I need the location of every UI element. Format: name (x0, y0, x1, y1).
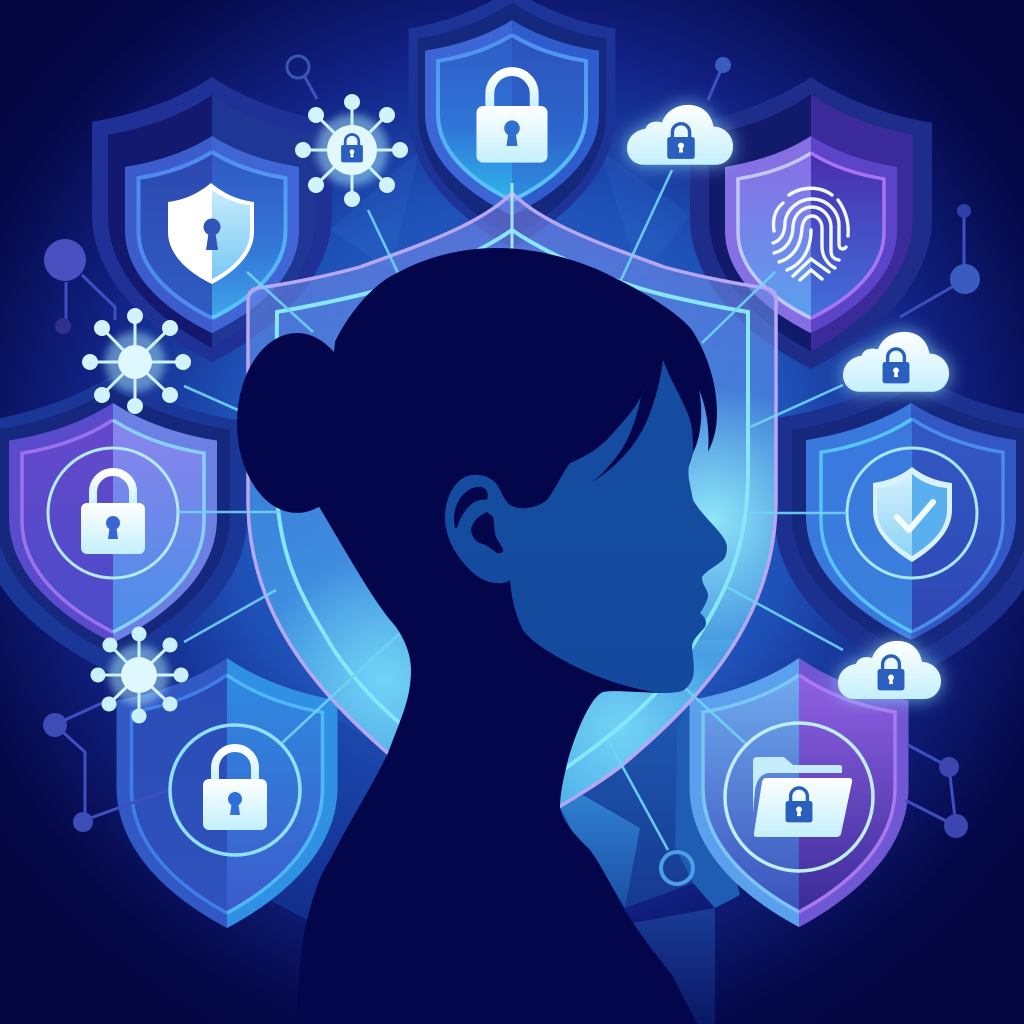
node hub: left lower (90, 626, 188, 724)
icon ring (48, 448, 178, 578)
hair bun (237, 333, 357, 513)
cloud lock: lower right (838, 641, 941, 699)
icon ring (170, 725, 300, 855)
shield: upper left (125, 136, 299, 333)
central translucent shield (248, 183, 780, 840)
icon ring (847, 448, 977, 578)
shield: top centre (425, 20, 599, 216)
shield halos (0, 0, 1024, 678)
shield: left padlock (9, 403, 217, 643)
node hub: lock (295, 94, 408, 207)
silhouette: person in profile (237, 248, 727, 1024)
shield: lower left padlock (116, 658, 338, 928)
hair strand (587, 360, 663, 485)
icon: padlock (203, 748, 267, 830)
face (445, 360, 727, 693)
network dots and rings (43, 56, 980, 884)
icon: check shield (873, 467, 952, 562)
connector lines (178, 170, 847, 850)
cloud lock: right (843, 332, 949, 392)
icon: fingerprint (773, 188, 848, 280)
node hub: left upper (82, 308, 191, 414)
shield: lower right folder (690, 658, 908, 927)
icon ring (725, 723, 873, 871)
cloud lock: top (627, 105, 733, 165)
icon: keyhole shield (168, 183, 254, 284)
icon: folder with lock (753, 757, 852, 837)
shield: right check (806, 403, 1016, 640)
icon: padlock (476, 72, 548, 163)
ear details (454, 487, 488, 528)
background facets (270, 150, 740, 1024)
shield: upper right fingerprint (725, 136, 897, 333)
icon: padlock (81, 472, 145, 554)
head, neck and body (297, 248, 717, 1024)
